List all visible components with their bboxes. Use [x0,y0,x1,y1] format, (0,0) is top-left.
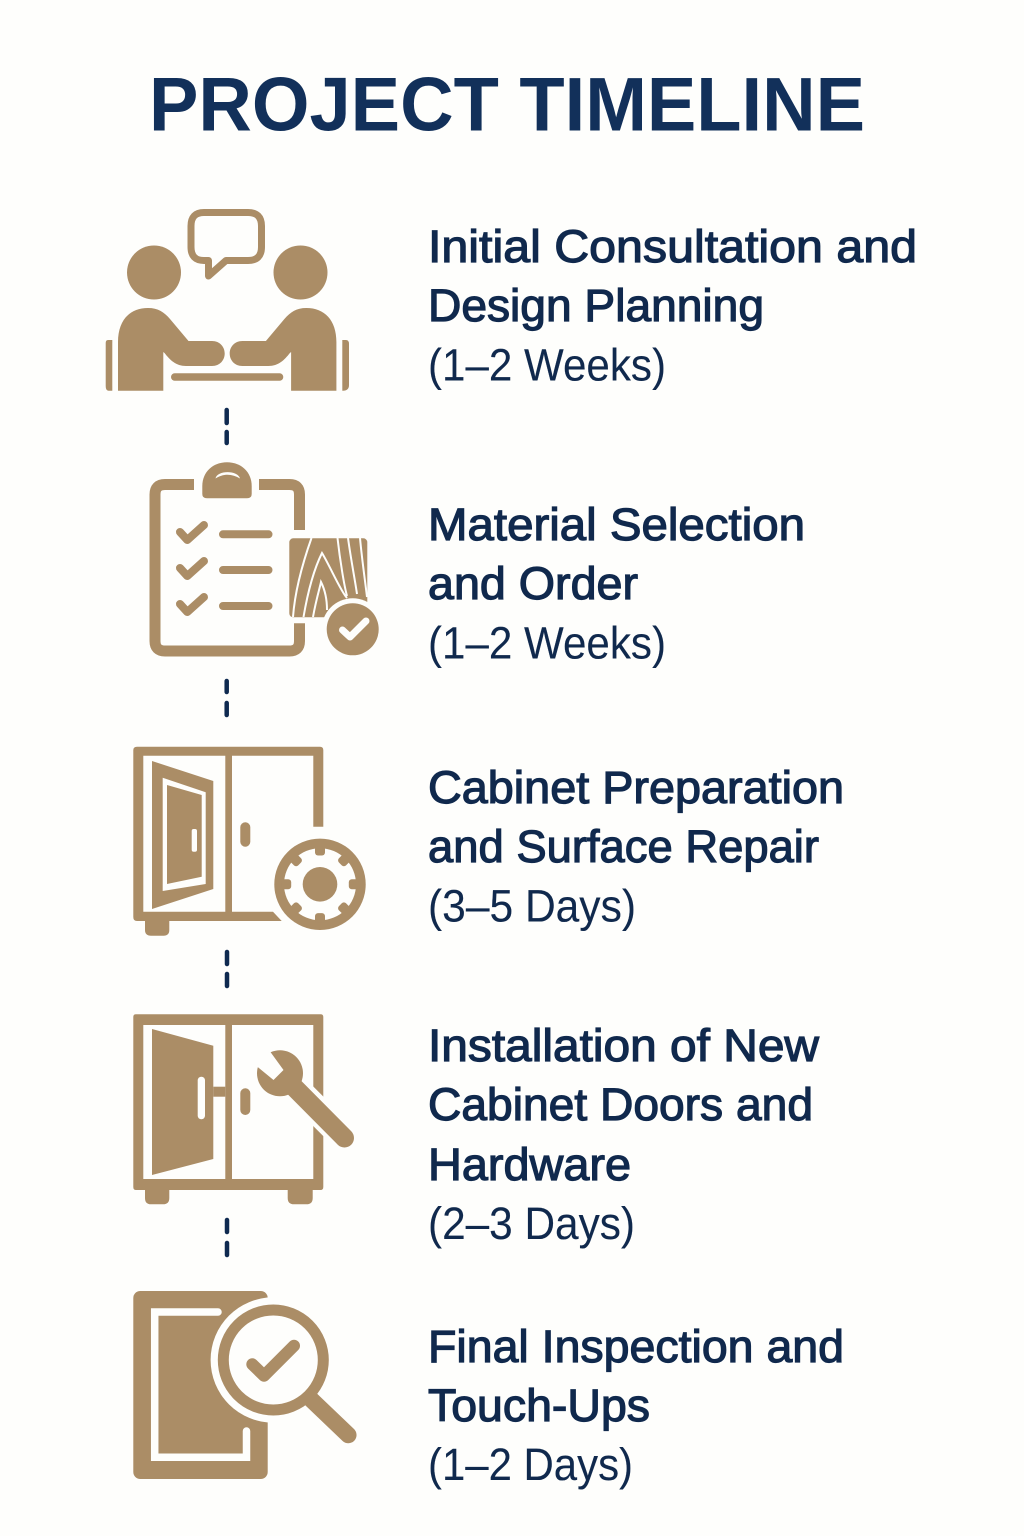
title: PROJECT TIMELINE [149,62,865,148]
step 1 text: (1–2 Weeks) [428,340,666,390]
step 4 text: Hardware [428,1139,631,1190]
icon part: handle [240,1088,250,1115]
step 3 text: and Surface Repair [428,821,819,872]
icon part: clip [202,462,252,498]
step 5 text: Touch-Ups [428,1380,650,1431]
icon part: open door [152,761,213,909]
step 4 text: Installation of New [428,1020,820,1071]
icon part: handle [240,822,250,847]
icon part: speech bubble [191,212,262,276]
icon part: wood sample [289,538,384,660]
step 5 text: (1–2 Days) [428,1439,633,1490]
step 3 text: Cabinet Preparation [428,762,844,813]
icon: cabinet with wrench [133,1014,345,1204]
step 2 text [428,499,805,668]
icon: consultation, two people at a table [106,212,349,391]
connector dashes 1 [224,410,229,443]
icon part: cabinet foot [145,921,169,936]
icon: door with magnifying glass [133,1291,348,1479]
icon: clipboard and wood sample [155,462,384,660]
icon: cabinet with gear [133,747,366,936]
icon part: magnifier handle [312,1400,348,1435]
icon part: check badge [327,603,379,655]
step 4 text: (2–3 Days) [428,1198,635,1249]
connector dashes 3 [225,952,229,986]
icon part: magnifier lens [223,1310,323,1410]
icon part: heads [127,246,328,300]
step 4 text: Cabinet Doors and [428,1079,813,1130]
step 2 text: Material Selection [428,499,805,550]
icon part: table [171,373,283,381]
step 5 text [428,1321,844,1490]
step 2 text: (1–2 Weeks) [428,618,666,668]
connector dashes 4 [225,1220,229,1255]
step 1 text [428,221,917,390]
step 1 text: Design Planning [428,280,764,331]
connector dashes 2 [224,681,229,715]
icon part: right person [230,308,336,391]
icon part: door panel [133,1291,336,1479]
icon part: left person [118,308,225,391]
icon part: gear badge [274,839,366,930]
icon part: open door [152,1029,225,1175]
step 2 text: and Order [428,558,638,609]
icon part: wrench [254,1050,345,1138]
step 5 text: Final Inspection and [428,1321,844,1372]
icon part: cabinet frame [133,747,323,921]
icon part: cabinet frame [133,1014,323,1190]
icon part: cabinet feet [145,1190,313,1204]
icon part: left chair [106,340,112,391]
icon part: right chair [342,340,349,391]
step 3 text: (3–5 Days) [428,880,636,932]
step 3 text [428,762,844,932]
icon part: clipboard frame [155,484,300,651]
icon part: check mark [252,1346,294,1376]
icon part: check rows [180,525,268,612]
step 1 text: Initial Consultation and [428,221,917,272]
step 4 text [428,1020,820,1249]
